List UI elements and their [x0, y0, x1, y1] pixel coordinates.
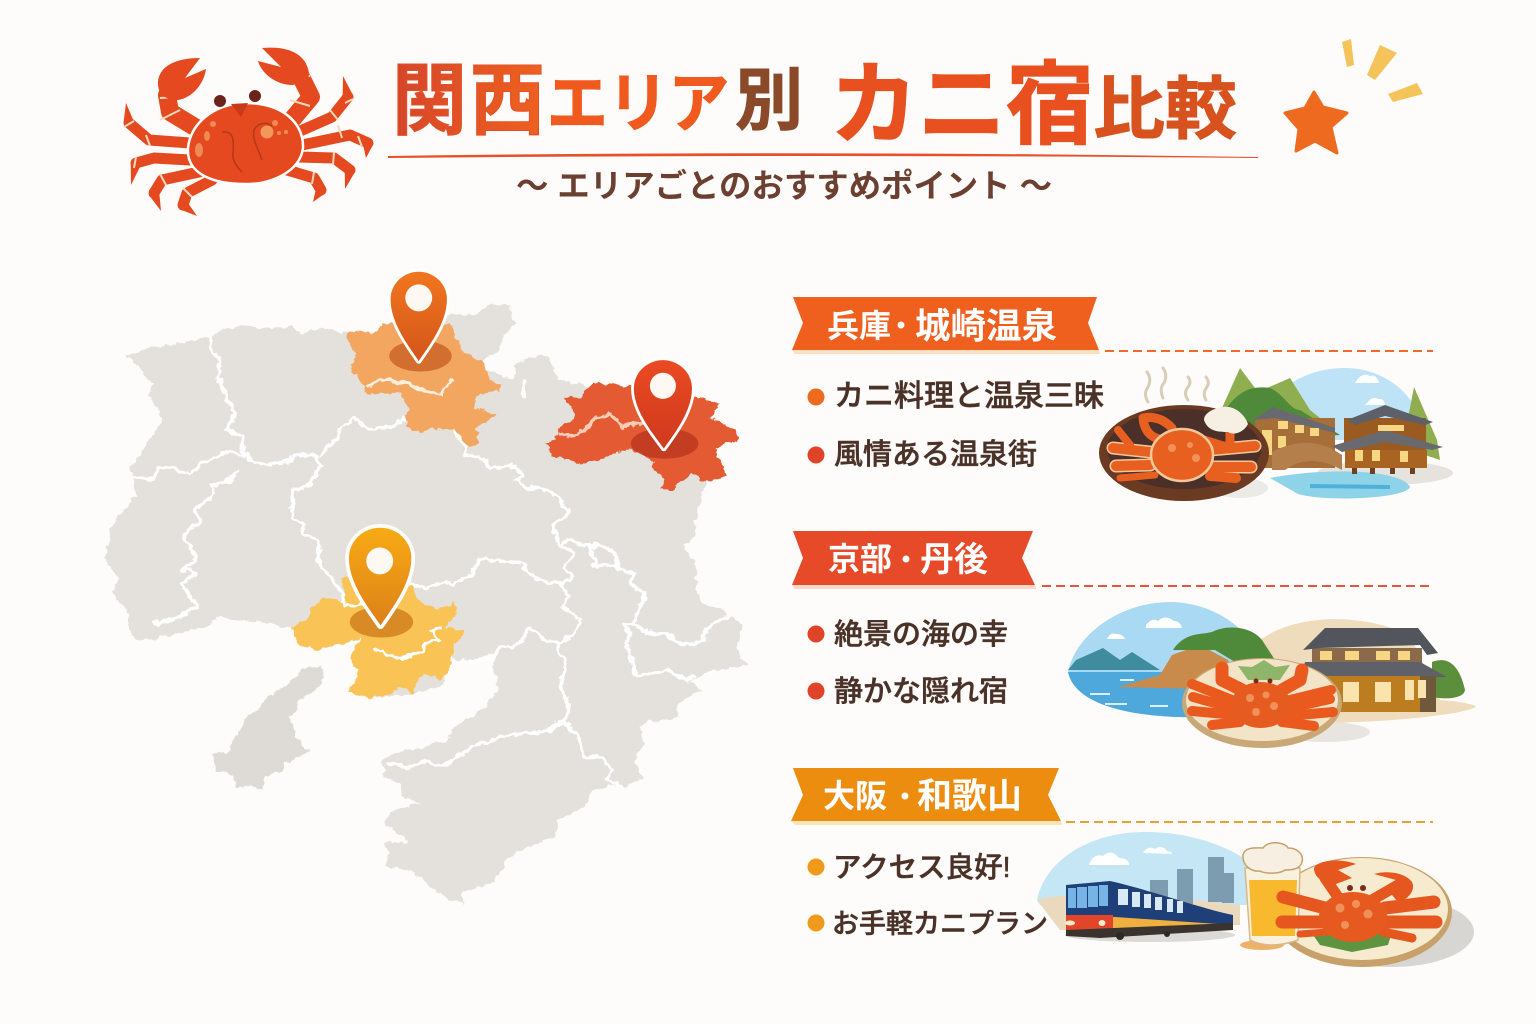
bullet list: Osaka: [808, 852, 1048, 939]
bullet list: Kyoto: 絶景の海の幸: [834, 618, 1008, 651]
illustration: onsen town and crab plate: [1099, 368, 1453, 501]
leg tips: [124, 76, 374, 216]
banner: Osaka: 和歌山: [917, 777, 1022, 816]
title: 比較: [1093, 71, 1237, 148]
location pins: [349, 272, 698, 638]
title: 関西: [392, 57, 548, 145]
icon: star with rays: [1285, 39, 1423, 153]
title: カニ宿: [830, 54, 1094, 155]
panel: Osaka Wakayama: [791, 768, 1474, 967]
banner: Kyoto: 丹後: [920, 541, 988, 579]
banner: Hyogo: [792, 297, 1100, 354]
banner: Kyoto: [792, 531, 1036, 589]
map of Kansai: [105, 272, 749, 906]
crab body: [188, 103, 303, 184]
banner: Hyogo: 兵庫: [827, 308, 891, 344]
title: 別: [735, 63, 803, 139]
bullet list: Hyogo: カニ料理と温泉三昧: [834, 380, 1104, 413]
mainland grey: [105, 305, 749, 906]
banner: Osaka: 大阪: [823, 778, 887, 814]
subtitle: 〜 エリアごとのおすすめポイント 〜: [516, 168, 1052, 204]
illustration: coastline, inn and crab plate: [1068, 602, 1476, 748]
title: エリア: [547, 68, 729, 140]
bullet list: Kyoto: [808, 618, 1008, 708]
pin: Osaka: [349, 528, 413, 638]
icon: crab logo: [124, 48, 374, 216]
left claw: [158, 58, 206, 100]
crab eyes: [214, 90, 261, 107]
panel: Kyoto Tango: [792, 531, 1476, 748]
bullet list: Kyoto: 静かな隠れ宿: [834, 675, 1008, 708]
bullet list: Hyogo: [808, 380, 1104, 471]
pin: Hyogo: [389, 272, 452, 372]
illustration: train, beer and crab plate: [1037, 832, 1474, 967]
title underline: [388, 153, 1258, 158]
Awaji island: [214, 666, 324, 789]
panel: Hyogo Kinosaki: [792, 297, 1453, 501]
bullet list: Osaka: アクセス良好!: [833, 852, 1010, 884]
red area: Kyoto Tango: [548, 382, 738, 489]
bullet list: Hyogo: 風情ある温泉街: [834, 438, 1037, 471]
orange area: Hyogo Kinosaki: [346, 323, 502, 447]
banner: Hyogo: 城崎温泉: [915, 306, 1057, 346]
title: [392, 54, 1237, 155]
map regions: [105, 305, 749, 906]
pin: Kyoto: [631, 360, 698, 459]
banner: Osaka: [791, 768, 1062, 825]
bullet list: Osaka: お手軽カニプラン: [832, 909, 1048, 939]
yellow area: Osaka Wakayama: [292, 578, 465, 698]
banner: Kyoto: 京部: [828, 541, 892, 577]
right claw: [258, 48, 309, 85]
